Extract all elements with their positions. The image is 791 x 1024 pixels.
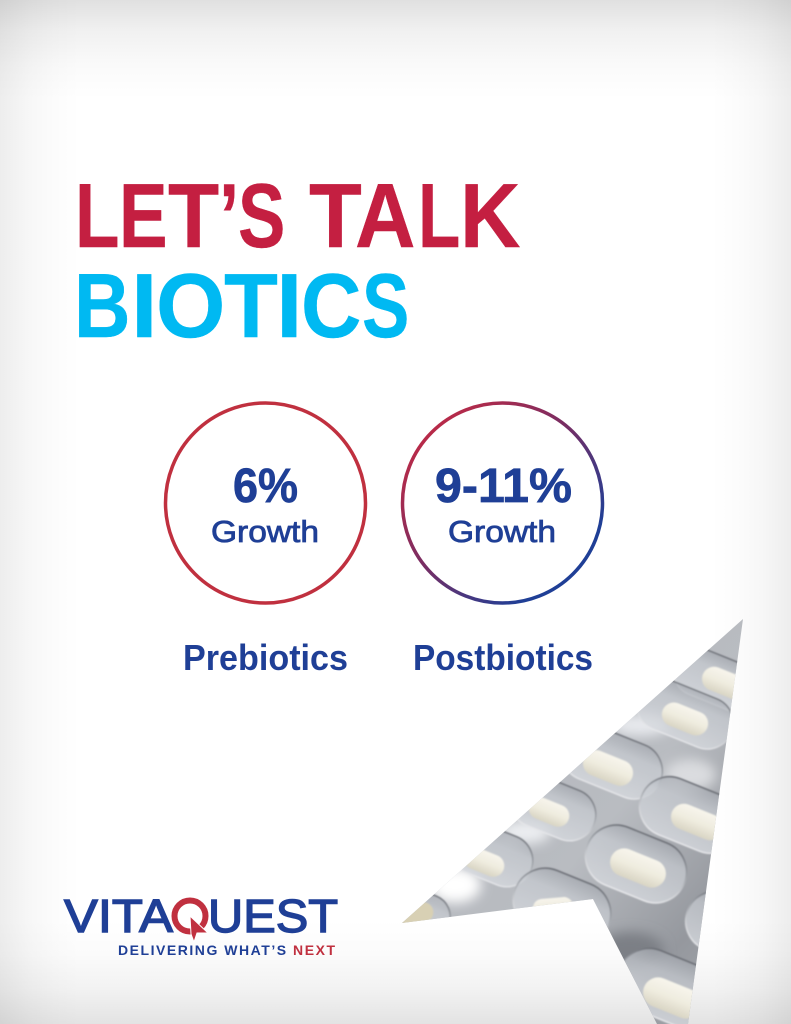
title line: LET'S TALK: K bbox=[460, 166, 520, 267]
wordmark: VITA: VITA bbox=[64, 890, 173, 942]
number: 6%: 6% bbox=[233, 460, 298, 513]
title line: BIOTICS bbox=[74, 256, 409, 357]
circle: prebiotics bbox=[166, 403, 366, 603]
title line: LET'S TALK: L bbox=[418, 166, 460, 267]
blisters bbox=[674, 649, 738, 711]
panel: prebiotics stat bbox=[166, 403, 366, 678]
label: postbiotics: Postbiotics bbox=[413, 637, 593, 678]
logo: Vitaquest bbox=[64, 890, 338, 958]
title line: BIOTICS: I bbox=[131, 256, 158, 357]
panel: postbiotics stat bbox=[402, 403, 602, 678]
title line: BIOTICS: S bbox=[362, 256, 409, 357]
title line: LET'S TALK bbox=[74, 166, 520, 267]
icon: Q with red arrow bbox=[174, 900, 208, 942]
title line: LET'S TALK: T bbox=[309, 166, 362, 267]
text: growth: Growth bbox=[211, 514, 319, 549]
capsules bbox=[702, 666, 736, 699]
circle: postbiotics bbox=[402, 403, 602, 603]
tagline: DELIVERING WHAT’S NEXT bbox=[118, 942, 335, 958]
label: prebiotics: Prebiotics bbox=[183, 637, 348, 678]
number: 9-11%: 9-11% bbox=[435, 460, 572, 513]
title line: LET'S TALK: L bbox=[74, 166, 119, 267]
title line: BIOTICS: C bbox=[301, 256, 361, 357]
title line: BIOTICS: B bbox=[74, 256, 131, 357]
title line: BIOTICS: O bbox=[156, 256, 225, 357]
title line: LET'S TALK: E bbox=[119, 166, 167, 267]
title line: LET'S TALK: S bbox=[238, 166, 285, 267]
title line: LET'S TALK: T bbox=[168, 166, 219, 267]
title line: BIOTICS: T bbox=[224, 256, 278, 357]
title line: BIOTICS: I bbox=[276, 256, 303, 357]
text: growth: Growth bbox=[448, 514, 556, 549]
arrow with blister pack photo bbox=[402, 619, 743, 1024]
title line: LET'S TALK: A bbox=[355, 166, 415, 267]
title line: LET'S TALK: ’ bbox=[219, 166, 240, 267]
wordmark: UEST: UEST bbox=[208, 890, 338, 942]
